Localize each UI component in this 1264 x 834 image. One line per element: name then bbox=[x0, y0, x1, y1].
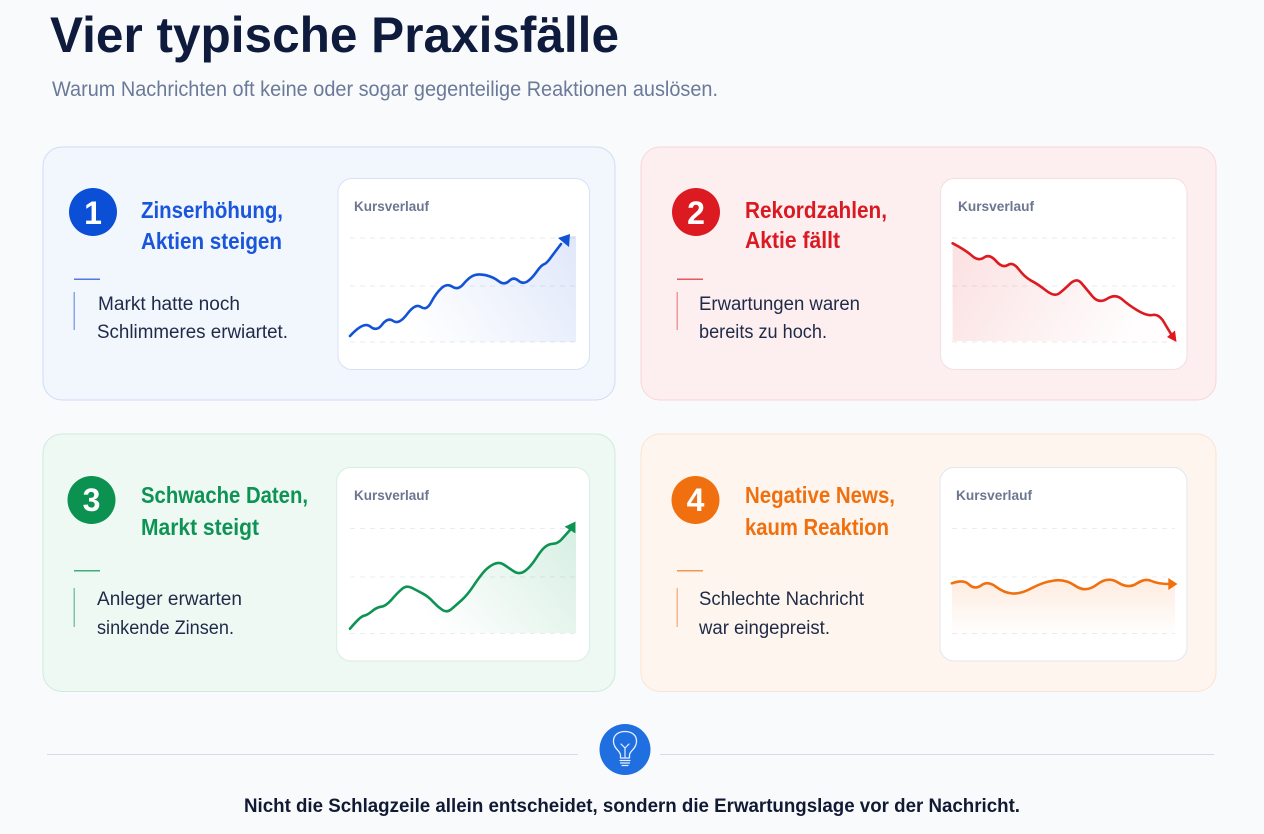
conclusion: Nicht die Schlagzeile allein entscheidet, sondern die Erwartungslage vor der Nachricht. bbox=[244, 796, 1020, 817]
heading 1 bbox=[141, 197, 283, 254]
icon: light bulb bbox=[600, 724, 650, 775]
heading 4: Negative News, bbox=[745, 482, 895, 508]
heading 3: Markt steigt bbox=[141, 514, 259, 540]
line chart 3 bbox=[350, 522, 576, 633]
description 1: Schlimmeres erwiartet. bbox=[97, 322, 288, 343]
chart label 2: Kursverlauf bbox=[958, 198, 1034, 214]
chart label 4: Kursverlauf bbox=[956, 487, 1032, 503]
heading 2 bbox=[745, 197, 887, 253]
heading 4 bbox=[745, 482, 895, 540]
description 1 bbox=[97, 294, 288, 343]
accent dash 1 bbox=[74, 278, 100, 280]
description 2 bbox=[699, 294, 860, 343]
panel: case 4 bbox=[641, 434, 1216, 692]
chart label 3: Kursverlauf bbox=[354, 487, 429, 503]
description 3: sinkende Zinsen. bbox=[97, 618, 234, 639]
chart card 2 bbox=[940, 178, 1187, 370]
panel: case 1 bbox=[43, 147, 615, 400]
accent dash 2 bbox=[677, 278, 703, 280]
description 1: Markt hatte noch bbox=[98, 294, 240, 315]
line chart 4 bbox=[952, 578, 1178, 636]
accent bar 2 bbox=[676, 292, 678, 330]
number badge 1: 1 bbox=[84, 195, 102, 231]
description 4 bbox=[698, 589, 865, 639]
accent dash 3 bbox=[74, 570, 100, 572]
heading 3: Schwache Daten, bbox=[141, 482, 308, 508]
heading 2: Aktie fällt bbox=[745, 227, 840, 253]
description 3 bbox=[97, 589, 242, 639]
description 2: Erwartungen waren bbox=[699, 294, 860, 315]
number badge 3: 3 bbox=[83, 482, 100, 518]
description 3: Anleger erwarten bbox=[97, 589, 242, 610]
heading 2: Rekordzahlen, bbox=[745, 197, 887, 223]
heading 1: Zinserhöhung, bbox=[141, 197, 283, 223]
chart card 1 bbox=[338, 178, 590, 370]
heading 3 bbox=[141, 482, 308, 540]
heading 1: Aktien steigen bbox=[141, 228, 282, 254]
heading 4: kaum Reaktion bbox=[745, 514, 889, 540]
description 4: war eingepreist. bbox=[698, 618, 830, 639]
number badge 3 bbox=[68, 476, 116, 524]
line chart 1 bbox=[350, 234, 576, 342]
number badge 2 bbox=[672, 188, 720, 236]
accent bar 3 bbox=[74, 588, 75, 627]
chart label 1: Kursverlauf bbox=[354, 198, 429, 214]
panel: case 2 bbox=[641, 147, 1216, 400]
description 2: bereits zu hoch. bbox=[699, 322, 827, 343]
line chart 2 bbox=[953, 243, 1176, 342]
number badge 4: 4 bbox=[687, 482, 705, 518]
title: Vier typische Praxisfälle bbox=[50, 7, 619, 63]
subtitle: Warum Nachrichten oft keine oder sogar gegenteilige Reaktionen auslösen. bbox=[52, 78, 718, 101]
chart card 3 bbox=[337, 468, 590, 661]
accent dash 4 bbox=[677, 570, 703, 572]
panel: case 3 bbox=[43, 434, 615, 692]
number badge 4 bbox=[672, 476, 720, 524]
description 4: Schlechte Nachricht bbox=[699, 589, 865, 610]
number badge 1 bbox=[69, 188, 117, 236]
accent bar 4 bbox=[676, 588, 678, 627]
number badge 2: 2 bbox=[687, 195, 705, 231]
chart card 4 bbox=[940, 468, 1187, 661]
accent bar 1 bbox=[74, 292, 75, 330]
